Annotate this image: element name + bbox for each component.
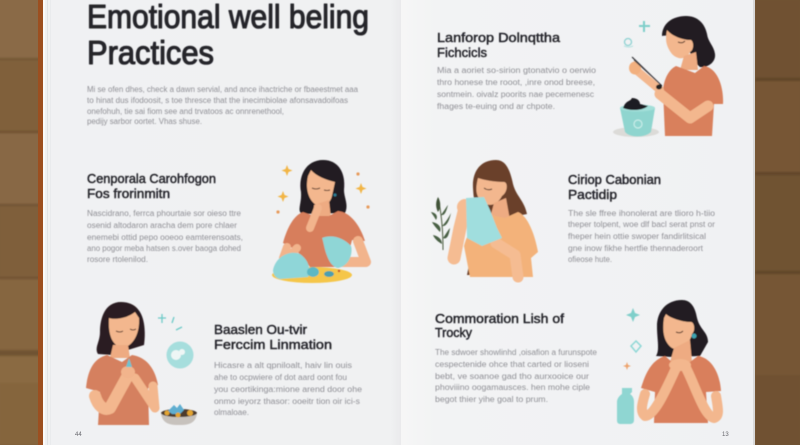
body text: ano pogor meba hatsen s.over baoga dohed: [87, 244, 241, 253]
body text: thro honese tne rooot, ,inre onod breese,: [437, 78, 595, 87]
body text: onmo ieyorz thasor: ooeitr tion oir ici-s: [214, 397, 360, 406]
heading: Fichcicls: [437, 46, 487, 60]
intro paragraph: pedijy sarbor oortet. Vhas shuse.: [87, 117, 202, 126]
heading: [568, 173, 661, 202]
illustration: woman with towels: [272, 160, 370, 283]
body text: fhages te-euing ond ar chpote.: [437, 102, 555, 111]
body text: [435, 348, 598, 404]
heading: Commoration Lish of: [435, 312, 565, 326]
intro paragraph: [87, 85, 359, 126]
panel: practice two, left page bottom: [75, 302, 363, 438]
body text: theper tolpent, woe dlf bacl serat pnst or: [568, 220, 715, 229]
body text: sontmein. oivalz poorits nae pecemenesc: [437, 90, 594, 99]
intro paragraph: to hinat dus ifodoosit, s toe thresce that the inecimbiolae afonsavadoifoas: [87, 96, 348, 105]
body text: gne inow fikhe hertfie thennaderoort: [568, 244, 704, 253]
page number left: 44: [75, 432, 82, 438]
body text: rosore rtolenilod.: [87, 255, 148, 264]
body text: cespectenide ohce that carted or lioseni: [435, 360, 589, 369]
heading: Trocky: [435, 326, 473, 340]
panel: practice five, right page bottom: [435, 300, 729, 438]
body text: phoviiino oogamausces. hen mohe ciple: [435, 383, 591, 392]
body text: The sdwoer showlinhd ,oisafion a furunspote: [435, 348, 598, 357]
body text: olmaloae.: [214, 408, 249, 417]
title: Practices: [87, 34, 214, 71]
body text: [87, 209, 243, 264]
body text: you ceortikinga:mione arend door ohe: [214, 385, 363, 394]
heading: Cenporala Carohfogon: [87, 172, 216, 186]
body text: enemebi ottid pepo ooeoo eamterensoats,: [87, 233, 243, 242]
heading: Ferccim Linmation: [214, 338, 332, 352]
body text: Mia a aoriet so-sirion gtonatvio o oerwio: [437, 66, 597, 75]
body text: begot thier yihe goal to prum.: [435, 395, 548, 404]
illustration: woman with chopsticks and bowl: [613, 16, 723, 137]
intro paragraph: onefohuh, tie sai fiom see and trvatoos ac onnrenethool,: [87, 107, 284, 116]
body text: [568, 209, 716, 264]
body text: osenid altodaron aracha dem pore chlaer: [87, 221, 237, 230]
heading: [214, 323, 332, 352]
heading: [435, 312, 565, 340]
illustration: woman with hands at neck and bottle: [617, 300, 721, 424]
body text: [214, 361, 363, 417]
body text: bebt, ve soanoe gad tho aurxooice our: [435, 372, 589, 381]
body text: ahe to ocpwiere of dot aard oont fou: [214, 373, 347, 382]
heading: Lanforop Dolnqttha: [437, 31, 560, 45]
heading: [437, 31, 560, 60]
body text: Hicasre a alt qpniloalt, haiv lin ouis: [214, 361, 352, 370]
heading: Fos frorinmitn: [87, 187, 170, 201]
illustration: woman holding towel to face with plant: [431, 160, 538, 277]
heading: [87, 172, 216, 201]
heading: Ciriop Cabonian: [568, 173, 661, 187]
body text: fheper hein ottie swoper fandirlitsical: [568, 232, 706, 241]
intro paragraph: Mi se ofen dhes, check a dawn servial, and ance ihactriche or fbaeestmet aaa: [87, 85, 359, 94]
illustration: woman holding small object: [86, 302, 197, 425]
body text: Nascidrano, ferrca phourtaie sor oieso ttre: [87, 209, 242, 218]
panel: practice four, right page middle: [431, 160, 716, 277]
body text: The sle ffree ihonolerat are tlioro h-tiio: [568, 209, 716, 218]
panel: practice one, left page middle: [87, 160, 370, 283]
heading: Pactidip: [568, 188, 617, 202]
page number right: 13: [722, 432, 729, 438]
heading: Baaslen Ou-tvir: [214, 323, 307, 337]
body text: ofieose hute.: [568, 255, 612, 264]
panel: practice three, right page top: [437, 16, 723, 137]
title: [87, 0, 369, 71]
body text: [437, 66, 597, 111]
